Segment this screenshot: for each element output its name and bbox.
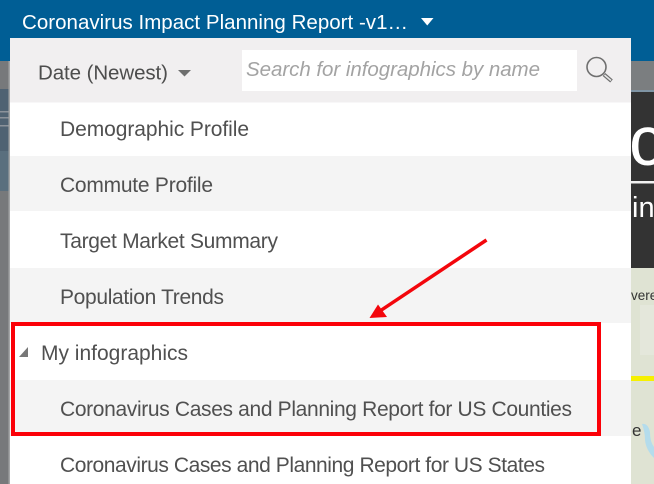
callout: red highlight box: [13, 324, 599, 434]
arrow: red pointer to highlight box: [370, 240, 486, 318]
row: My infographics: [10, 323, 631, 380]
search box: [242, 50, 577, 91]
icon: header dropdown caret: [421, 18, 434, 26]
row: Coronavirus Cases and Planning Report for US States: [10, 436, 631, 484]
row: Population Trends: Population Trends: [60, 286, 224, 309]
row: My infographics: My infographics: [41, 342, 188, 365]
icon: magnifying glass: [587, 58, 612, 81]
row: Coronavirus Cases and Planning Report for US Counties: [10, 380, 631, 436]
background: right report preview: [629, 61, 654, 484]
row: Population Trends: [10, 268, 631, 323]
row: Commute Profile: [10, 156, 631, 211]
header bar: [0, 0, 654, 61]
header title: Coronavirus Impact Planning Report -v1…: [22, 11, 408, 34]
row: Coronavirus Cases and Planning Report for US States: Coronavirus Cases and Planning Report for US States: [60, 454, 545, 477]
row: Demographic Profile: [10, 102, 631, 156]
background: right report preview: in: [632, 192, 654, 224]
background: right report preview: e: [632, 421, 641, 440]
background: left map strip: [0, 0, 10, 484]
search box: Search for infographics by name: [246, 58, 540, 81]
row: Coronavirus Cases and Planning Report for US Counties: Coronavirus Cases and Planning Report for US Counties: [60, 398, 572, 421]
sort selector: Date (Newest): [38, 62, 168, 84]
row: Target Market Summary: [10, 211, 631, 268]
row: Demographic Profile: Demographic Profile: [60, 118, 249, 141]
toolbar: [10, 38, 631, 102]
row: Commute Profile: Commute Profile: [60, 174, 213, 197]
row: Target Market Summary: Target Market Summary: [60, 230, 278, 253]
